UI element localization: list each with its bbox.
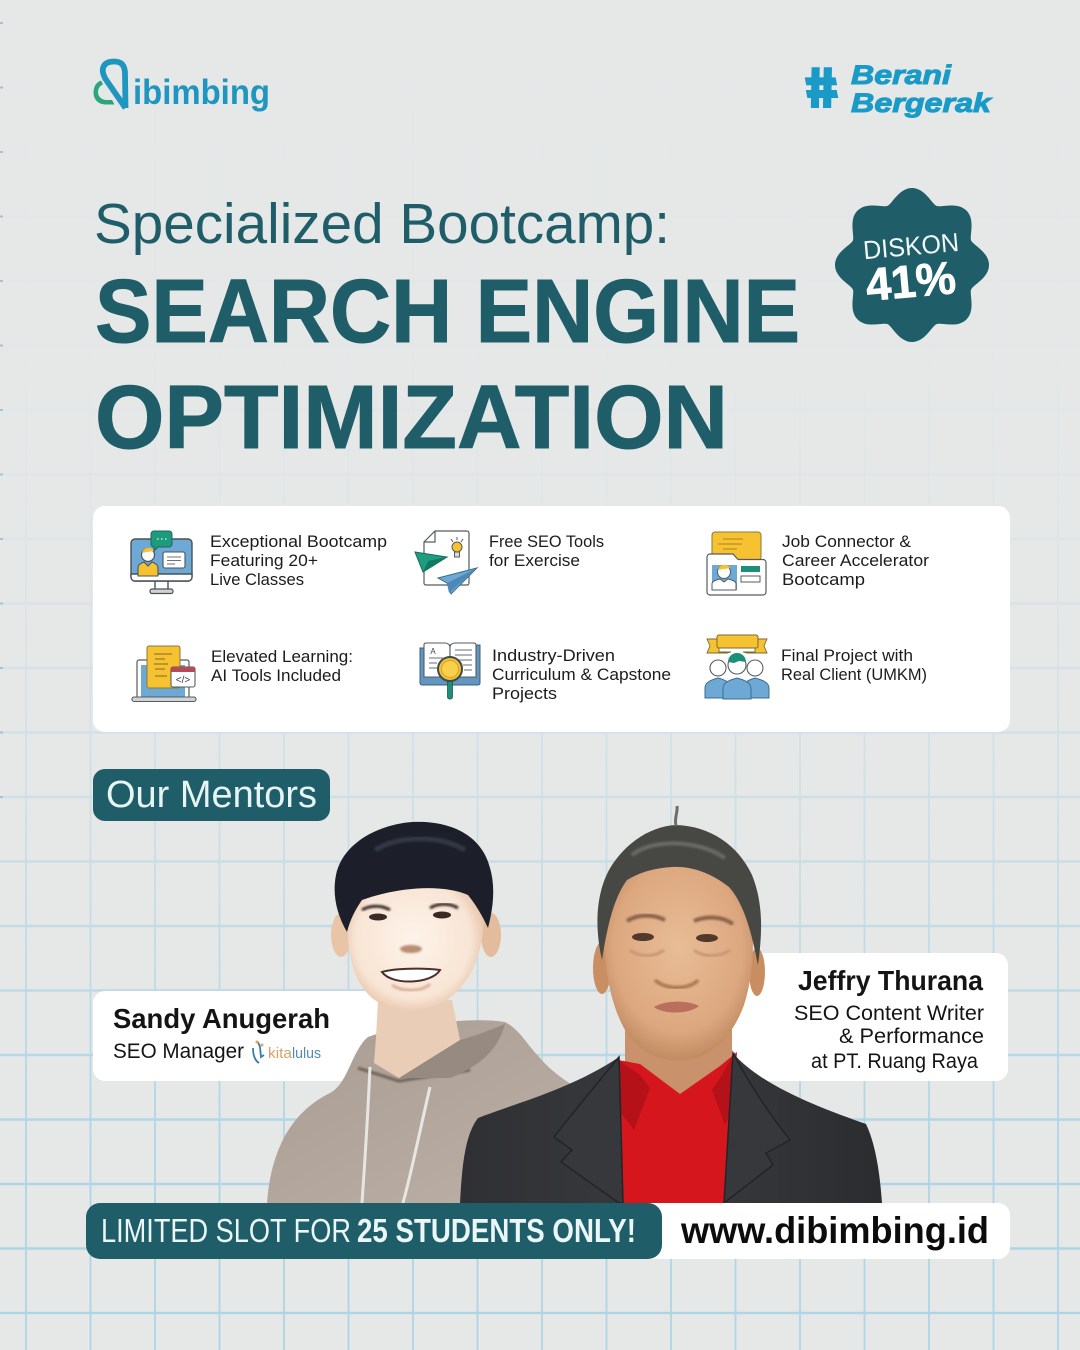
title: OPTIMIZATION (95, 368, 728, 468)
card: Jeffry Thurana: at PT. Ruang Raya (811, 1050, 978, 1073)
photo: Jeffry Thurana portrait (460, 806, 882, 1203)
text: job connector: Bootcamp (782, 570, 865, 589)
hashtag: Berani Bergerak: Bergerak (851, 88, 993, 118)
logo: dibimbing: ibimbing (133, 73, 270, 112)
logo: dibimbing (94, 62, 270, 112)
ears (331, 913, 351, 957)
photo: Sandy Anugerah portrait (267, 822, 610, 1203)
discount badge: 41% (864, 251, 958, 311)
title: Specialized Bootcamp: (94, 192, 670, 256)
hair (597, 825, 761, 965)
smile (382, 969, 440, 982)
text: final project: Final Project with (781, 646, 913, 665)
ears (593, 942, 611, 994)
text: exceptional bootcamp: Featuring 20+ (210, 551, 318, 570)
discount badge (835, 188, 989, 342)
bottom bar: website (640, 1203, 1010, 1259)
text: exceptional bootcamp: Live Classes (210, 570, 304, 589)
text: exceptional bootcamp (210, 532, 387, 589)
hashtag: Berani Bergerak: # (801, 57, 842, 118)
text: industry driven: Projects (492, 684, 557, 703)
red shirt (618, 1052, 737, 1203)
nose (400, 945, 422, 953)
bottom bar: website: www.dibimbing.id (680, 1210, 989, 1251)
icon: AI tools laptop (132, 646, 196, 702)
heading: our mentors: Our Mentors (106, 774, 317, 816)
text: job connector: Career Accelerator (782, 551, 929, 570)
card: Sandy Anugerah: Sandy Anugerah (113, 1003, 330, 1034)
icon: open book and magnifier: A (430, 647, 436, 656)
icon: paper planes and document (415, 531, 477, 594)
brows and eyes (627, 916, 733, 924)
text: final project (781, 646, 927, 684)
bottom bar: limited slot: 25 STUDENTS ONLY! (357, 1212, 636, 1249)
card: Jeffry Thurana: SEO Content Writer (794, 1002, 984, 1025)
nose (655, 980, 698, 988)
hair (335, 822, 493, 932)
text: free seo tools: for Exercise (489, 551, 580, 570)
text: exceptional bootcamp: Exceptional Bootcamp (210, 532, 387, 551)
discount badge: DISKON (862, 227, 960, 265)
suit (460, 1053, 882, 1203)
text: job connector: Job Connector & (782, 532, 912, 551)
card: Jeffry Thurana (720, 953, 1008, 1081)
hashtag: Berani Bergerak (801, 57, 993, 118)
card: Sandy Anugerah: SEO Manager (113, 1040, 244, 1063)
neck (625, 1020, 732, 1095)
title (94, 192, 800, 468)
text: free seo tools (489, 532, 604, 570)
card: Jeffry Thurana: & Performance (839, 1025, 984, 1048)
lapels (554, 1057, 623, 1203)
text: elevated learning: Elevated Learning: (211, 647, 353, 666)
panel: bootcamp features (93, 506, 1010, 732)
icon: AI tools laptop: </> (176, 675, 190, 686)
bottom bar: limited slot: LIMITED SLOT FOR (101, 1212, 351, 1249)
text: industry driven: Curriculum & Capstone (492, 665, 671, 684)
icon: job connector card (707, 532, 766, 595)
mouth (654, 1002, 699, 1013)
face (604, 866, 753, 1060)
card: Jeffry Thurana: Jeffry Thurana (798, 965, 983, 996)
text: industry driven: Industry-Driven (492, 646, 615, 665)
logo: kitalulus: lulus (292, 1046, 321, 1062)
face (347, 869, 484, 1010)
icon: open book and magnifier (420, 643, 480, 699)
neck (374, 1000, 460, 1078)
logo: kitalulus: kita (268, 1046, 293, 1062)
text: free seo tools: Free SEO Tools (489, 532, 604, 551)
hood strings (362, 1067, 370, 1203)
bottom bar: limited slot (86, 1203, 662, 1259)
logo: kitalulus (253, 1040, 321, 1063)
text: final project: Real Client (UMKM) (781, 665, 927, 684)
title: SEARCH ENGINE (95, 262, 800, 362)
text: industry driven (492, 646, 671, 703)
text: elevated learning: AI Tools Included (211, 666, 341, 685)
eyes and brows (362, 904, 458, 910)
text: elevated learning (211, 647, 353, 685)
card: Sandy Anugerah (93, 991, 403, 1081)
icon: live class monitor (131, 531, 192, 594)
icon: team with banner (705, 635, 769, 699)
hashtag: Berani Bergerak: Berani (851, 60, 952, 90)
hoodie (267, 1020, 610, 1203)
text: job connector (782, 532, 929, 589)
